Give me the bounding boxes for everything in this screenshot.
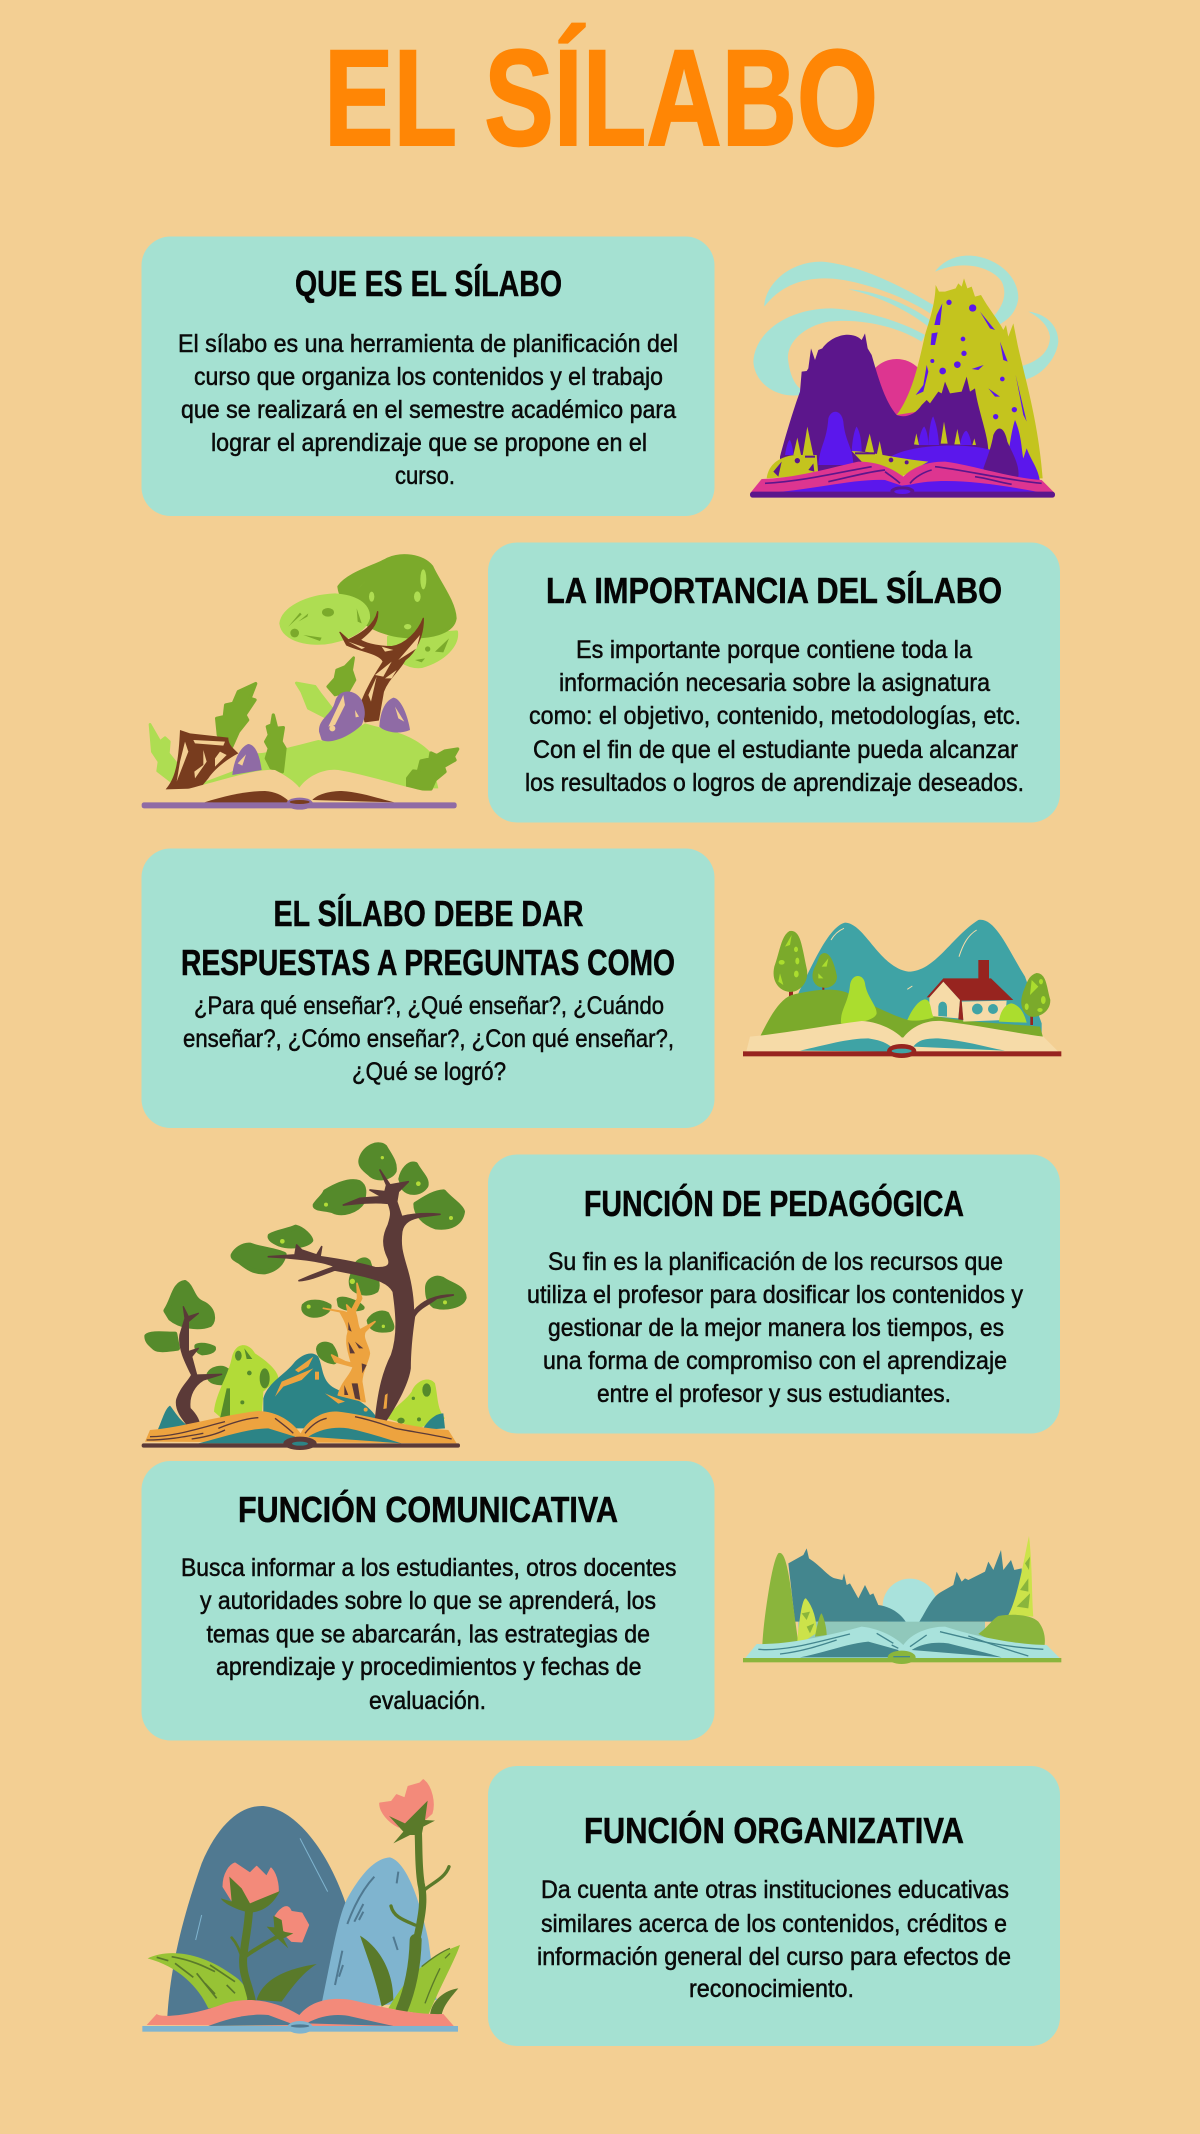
text block: función organizativa: Da cuenta ante otras instituciones educativas xyxy=(541,1876,1009,1904)
icon: book with lake and sunrise xyxy=(743,1536,1061,1664)
text block: función organizativa: similares acerca de los contenidos, créditos e xyxy=(541,1910,1007,1938)
text block: preguntas xyxy=(183,992,674,1086)
text block: función comunicativa: y autoridades sobre lo que se aprenderá, los xyxy=(200,1587,656,1615)
panel: el sílabo debe dar respuestas xyxy=(142,848,714,1128)
text block: preguntas: enseñar?, ¿Cómo enseñar?, ¿Con qué enseñar?, xyxy=(183,1025,674,1053)
text block: función pedagógica: gestionar de la mejor manera los tiempos, es xyxy=(548,1314,1004,1342)
text block: función comunicativa: Busca informar a los estudiantes, otros docentes xyxy=(181,1554,676,1582)
icon: book with purple and yellow mountains xyxy=(750,256,1058,498)
heading: el sílabo debe dar respuestas a preguntas como xyxy=(181,893,675,983)
text block: preguntas: ¿Para qué enseñar?, ¿Qué enseñar?, ¿Cuándo xyxy=(194,992,664,1020)
text block: función organizativa xyxy=(537,1876,1011,2003)
panel: que es el sílabo xyxy=(142,236,714,516)
heading: función organizativa: FUNCIÓN ORGANIZATIVA xyxy=(584,1809,964,1851)
text block: definición: curso que organiza los contenidos y el trabajo xyxy=(194,363,663,391)
text block: función organizativa: información general del curso para efectos de xyxy=(537,1943,1011,1971)
text block: importancia: como: el objetivo, contenido, metodologías, etc. xyxy=(529,702,1021,730)
icon: book with trees xyxy=(142,1145,464,1450)
text block: función comunicativa: evaluación. xyxy=(369,1687,486,1715)
panel: función organizativa xyxy=(488,1766,1060,2046)
text block: función comunicativa: aprendizaje y procedimientos y fechas de xyxy=(216,1653,642,1681)
text block: importancia: información necesaria sobre la asignatura xyxy=(559,669,990,697)
text block: función comunicativa xyxy=(181,1554,676,1715)
heading: función de pedagógica: FUNCIÓN DE PEDAGÓGICA xyxy=(584,1182,964,1224)
text block: preguntas: ¿Qué se logró? xyxy=(352,1058,506,1086)
text block: definición: lograr el aprendizaje que se propone en el xyxy=(211,429,647,457)
heading: que es el sílabo: QUE ES EL SÍLABO xyxy=(295,263,562,304)
text block: importancia: Es importante porque contiene toda la xyxy=(576,636,972,664)
text block: definición: curso. xyxy=(395,462,455,490)
heading: función comunicativa: FUNCIÓN COMUNICATIVA xyxy=(238,1488,618,1530)
text block: importancia: los resultados o logros de aprendizaje deseados. xyxy=(525,769,1024,797)
text block: función pedagógica xyxy=(527,1248,1023,1408)
text block: definición xyxy=(178,330,678,490)
panel: la importancia del sílabo xyxy=(488,542,1060,822)
icon: book with house and teal mountains xyxy=(743,920,1061,1058)
text block: función pedagógica: entre el profesor y sus estudiantes. xyxy=(597,1380,951,1408)
text block: función comunicativa: temas que se abarcarán, las estrategias de xyxy=(206,1620,650,1648)
heading: el sílabo debe dar respuestas a preguntas como: RESPUESTAS A PREGUNTAS COMO xyxy=(181,942,675,983)
text block: función pedagógica: Su fin es la planificación de los recursos que xyxy=(548,1248,1003,1276)
heading: el sílabo debe dar respuestas a preguntas como: EL SÍLABO DEBE DAR xyxy=(274,893,584,934)
title: EL SÍLABO xyxy=(324,22,878,175)
text block: importancia xyxy=(525,636,1024,797)
panel: función pedagógica xyxy=(488,1154,1060,1434)
panel: función comunicativa xyxy=(142,1461,714,1740)
text block: función organizativa: reconocimiento. xyxy=(689,1975,854,2003)
text block: función pedagógica: utiliza el profesor para dosificar los contenidos y xyxy=(527,1281,1023,1309)
heading: la importancia del sílabo: LA IMPORTANCIA DEL SÍLABO xyxy=(546,570,1002,611)
text block: definición: que se realizará en el semestre académico para xyxy=(181,396,676,424)
text block: definición: El sílabo es una herramienta de planificación del xyxy=(178,330,678,358)
icon: book with green tree and purple rocks xyxy=(142,556,458,810)
text block: importancia: Con el fin de que el estudiante pueda alcanzar xyxy=(533,736,1018,764)
icon: book with flowers and blue rocks xyxy=(142,1780,460,2034)
text block: función pedagógica: una forma de compromiso con el aprendizaje xyxy=(543,1347,1007,1375)
